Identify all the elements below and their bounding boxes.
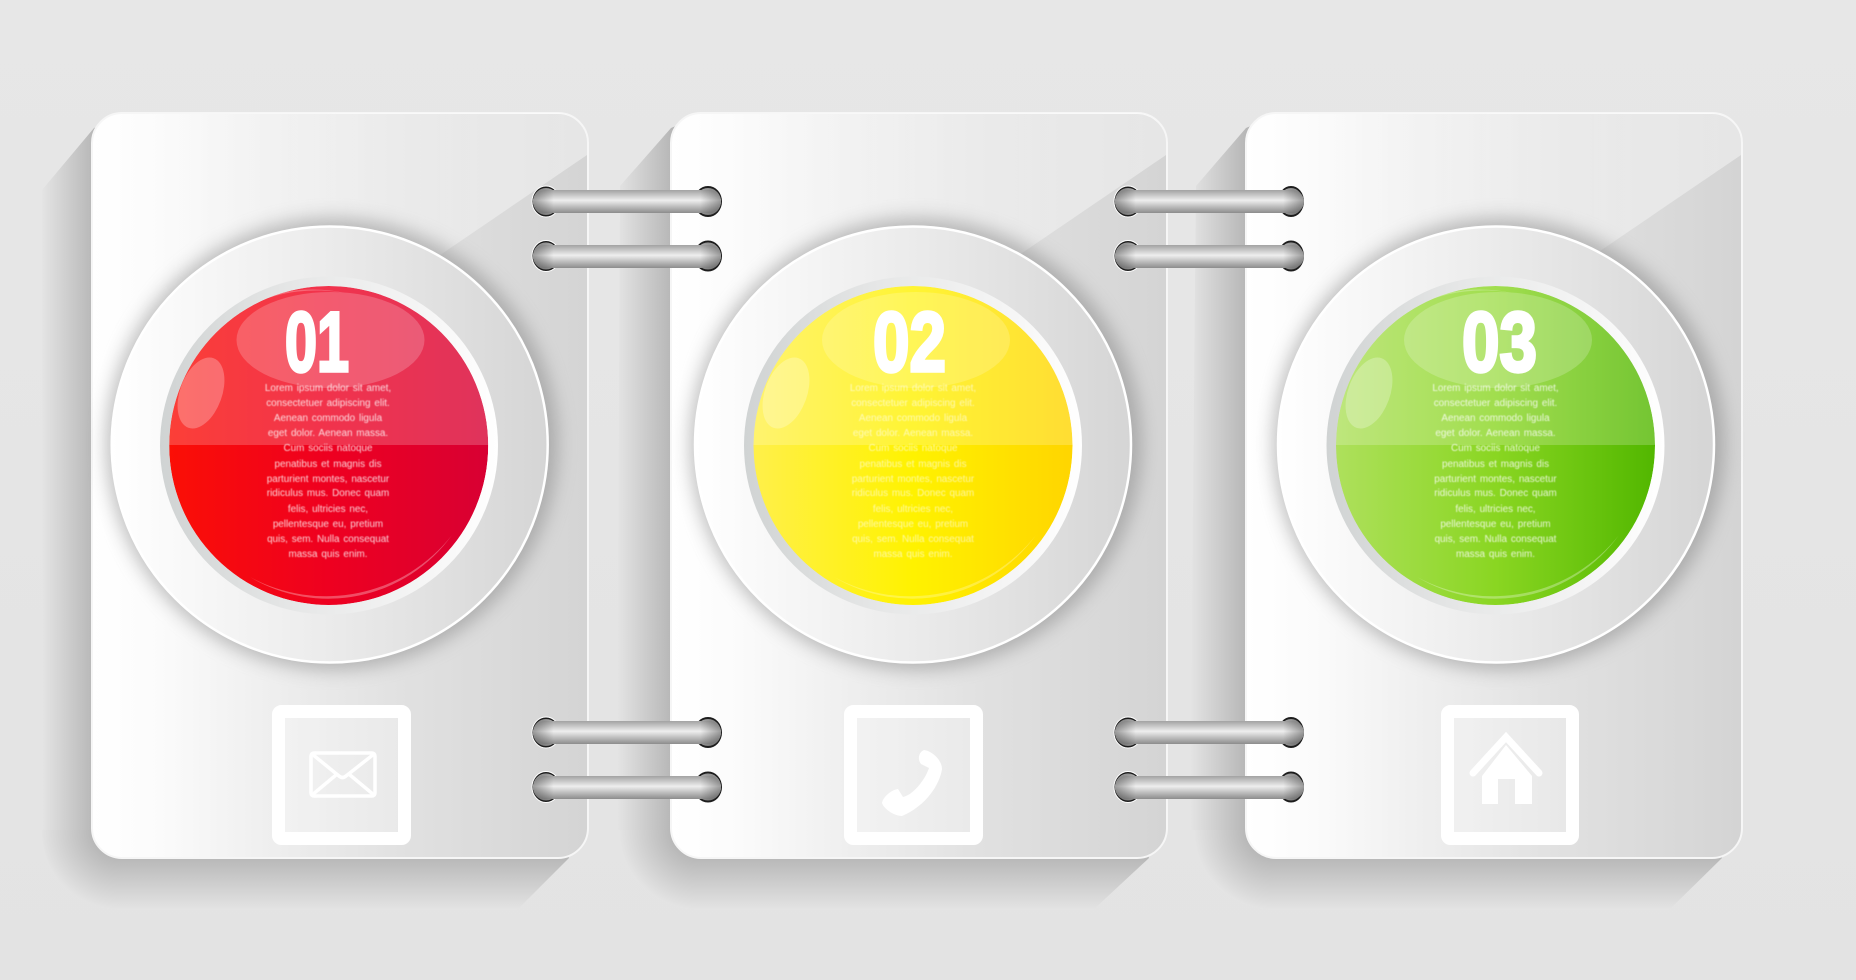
body text 03: massa quis enim.	[1456, 549, 1535, 560]
body text 02: Lorem ipsum dolor sit amet,	[850, 383, 976, 394]
ring 8	[1114, 772, 1304, 802]
ring 1	[532, 186, 722, 217]
card 01 plate	[112, 226, 548, 662]
body text 02: Cum sociis natoque	[869, 443, 958, 454]
number 01: 01	[285, 295, 349, 389]
body text 01: eget dolor. Aenean massa.	[268, 428, 388, 439]
body text 03: felis, ultricies nec,	[1455, 504, 1536, 515]
circle 03	[1336, 286, 1656, 605]
icon box: phone	[850, 712, 976, 838]
body text 03: parturient montes, nascetur	[1434, 474, 1557, 485]
side highlight ellipse	[1346, 358, 1392, 428]
top highlight ellipse	[236, 292, 424, 388]
card 03 rim	[1326, 276, 1664, 614]
icon box: home	[1448, 712, 1572, 838]
ring 4	[532, 772, 722, 802]
body text 03: Cum sociis natoque	[1451, 443, 1540, 454]
icon: house	[1473, 737, 1539, 804]
body text 03: ridiculus mus. Donec quam	[1434, 488, 1557, 499]
body text 01: pellentesque eu, pretium	[273, 519, 383, 530]
number 03: 03	[1462, 295, 1537, 389]
number 02: 02	[873, 295, 946, 389]
body text 01: Cum sociis natoque	[284, 443, 373, 454]
top highlight ellipse	[822, 292, 1010, 388]
body text 01: consectetuer adipiscing elit.	[266, 398, 390, 409]
bottom glow arc	[834, 535, 1036, 599]
body text 02: quis, sem. Nulla consequat	[852, 534, 974, 545]
card 01 diagonal sheen	[92, 113, 587, 492]
upper half tint	[1336, 286, 1656, 445]
panel: card 03	[1246, 113, 1742, 858]
body text 02	[850, 383, 976, 560]
side highlight ellipse	[178, 358, 224, 428]
circle 02	[753, 286, 1073, 605]
body text 03	[1432, 383, 1559, 560]
top glow arc	[1434, 290, 1509, 298]
body text 03: Lorem ipsum dolor sit amet,	[1432, 383, 1559, 394]
upper half tint	[753, 286, 1073, 445]
top glow arc	[268, 290, 342, 298]
card 02 rim	[744, 276, 1082, 614]
body text 01: felis, ultricies nec,	[288, 504, 368, 515]
ring 6	[1114, 240, 1304, 272]
ring 5	[1114, 186, 1304, 217]
upper half tint	[169, 286, 489, 445]
icon box: mail	[278, 712, 404, 838]
body text 01: massa quis enim.	[288, 549, 368, 560]
body text 01: Aenean commodo ligula	[274, 413, 383, 424]
body text 02: penatibus et magnis dis	[859, 459, 967, 470]
icon: envelope	[311, 753, 375, 796]
body text 01: ridiculus mus. Donec quam	[267, 488, 389, 499]
body text 02: felis, ultricies nec,	[873, 504, 953, 515]
card 03 diagonal sheen	[1246, 113, 1741, 492]
ring 3	[532, 717, 722, 748]
card 02 plate	[695, 226, 1131, 662]
top highlight ellipse	[1404, 292, 1592, 388]
icon: phone handset	[882, 750, 942, 816]
ring 7	[1114, 717, 1304, 748]
body text 02: pellentesque eu, pretium	[858, 519, 968, 530]
binding rings between card 02 and card 03	[1114, 186, 1304, 802]
body text 03: consectetuer adipiscing elit.	[1434, 398, 1557, 409]
body text 02: massa quis enim.	[873, 549, 953, 560]
body text 01: penatibus et magnis dis	[274, 459, 382, 470]
binding rings between card 01 and card 02	[532, 186, 722, 802]
body text 02: ridiculus mus. Donec quam	[852, 488, 974, 499]
body text 01	[265, 383, 391, 560]
ring 2	[532, 240, 722, 272]
drop shadows of the cards	[42, 116, 1722, 910]
body text 02: Aenean commodo ligula	[859, 413, 968, 424]
body text 02: eget dolor. Aenean massa.	[853, 428, 973, 439]
card 02 diagonal sheen	[671, 113, 1166, 492]
body text 02: consectetuer adipiscing elit.	[851, 398, 975, 409]
card 03 plate	[1278, 226, 1714, 662]
body text 03: Aenean commodo ligula	[1441, 413, 1550, 424]
circle 01	[169, 286, 489, 605]
body text 03: eget dolor. Aenean massa.	[1435, 428, 1556, 439]
body text 01: quis, sem. Nulla consequat	[267, 534, 389, 545]
card 02 paper	[671, 113, 1167, 858]
bottom glow arc	[1417, 535, 1619, 599]
body text 01: Lorem ipsum dolor sit amet,	[265, 383, 391, 394]
card 03 paper	[1246, 113, 1742, 858]
side highlight ellipse	[762, 358, 810, 428]
body text 01: parturient montes, nascetur	[267, 474, 390, 485]
bottom glow arc	[250, 535, 452, 599]
body text 03: pellentesque eu, pretium	[1440, 519, 1551, 530]
card 01 paper	[92, 113, 588, 858]
panel: card 01	[92, 113, 588, 858]
card 02 plate shadow	[690, 218, 1142, 670]
panel: card 02	[671, 113, 1167, 858]
body text 02: parturient montes, nascetur	[852, 474, 975, 485]
card 01 rim	[160, 276, 498, 614]
body text 03: quis, sem. Nulla consequat	[1435, 534, 1557, 545]
card 01 plate shadow	[106, 218, 558, 670]
body text 03: penatibus et magnis dis	[1442, 459, 1549, 470]
card 03 plate shadow	[1273, 218, 1725, 670]
